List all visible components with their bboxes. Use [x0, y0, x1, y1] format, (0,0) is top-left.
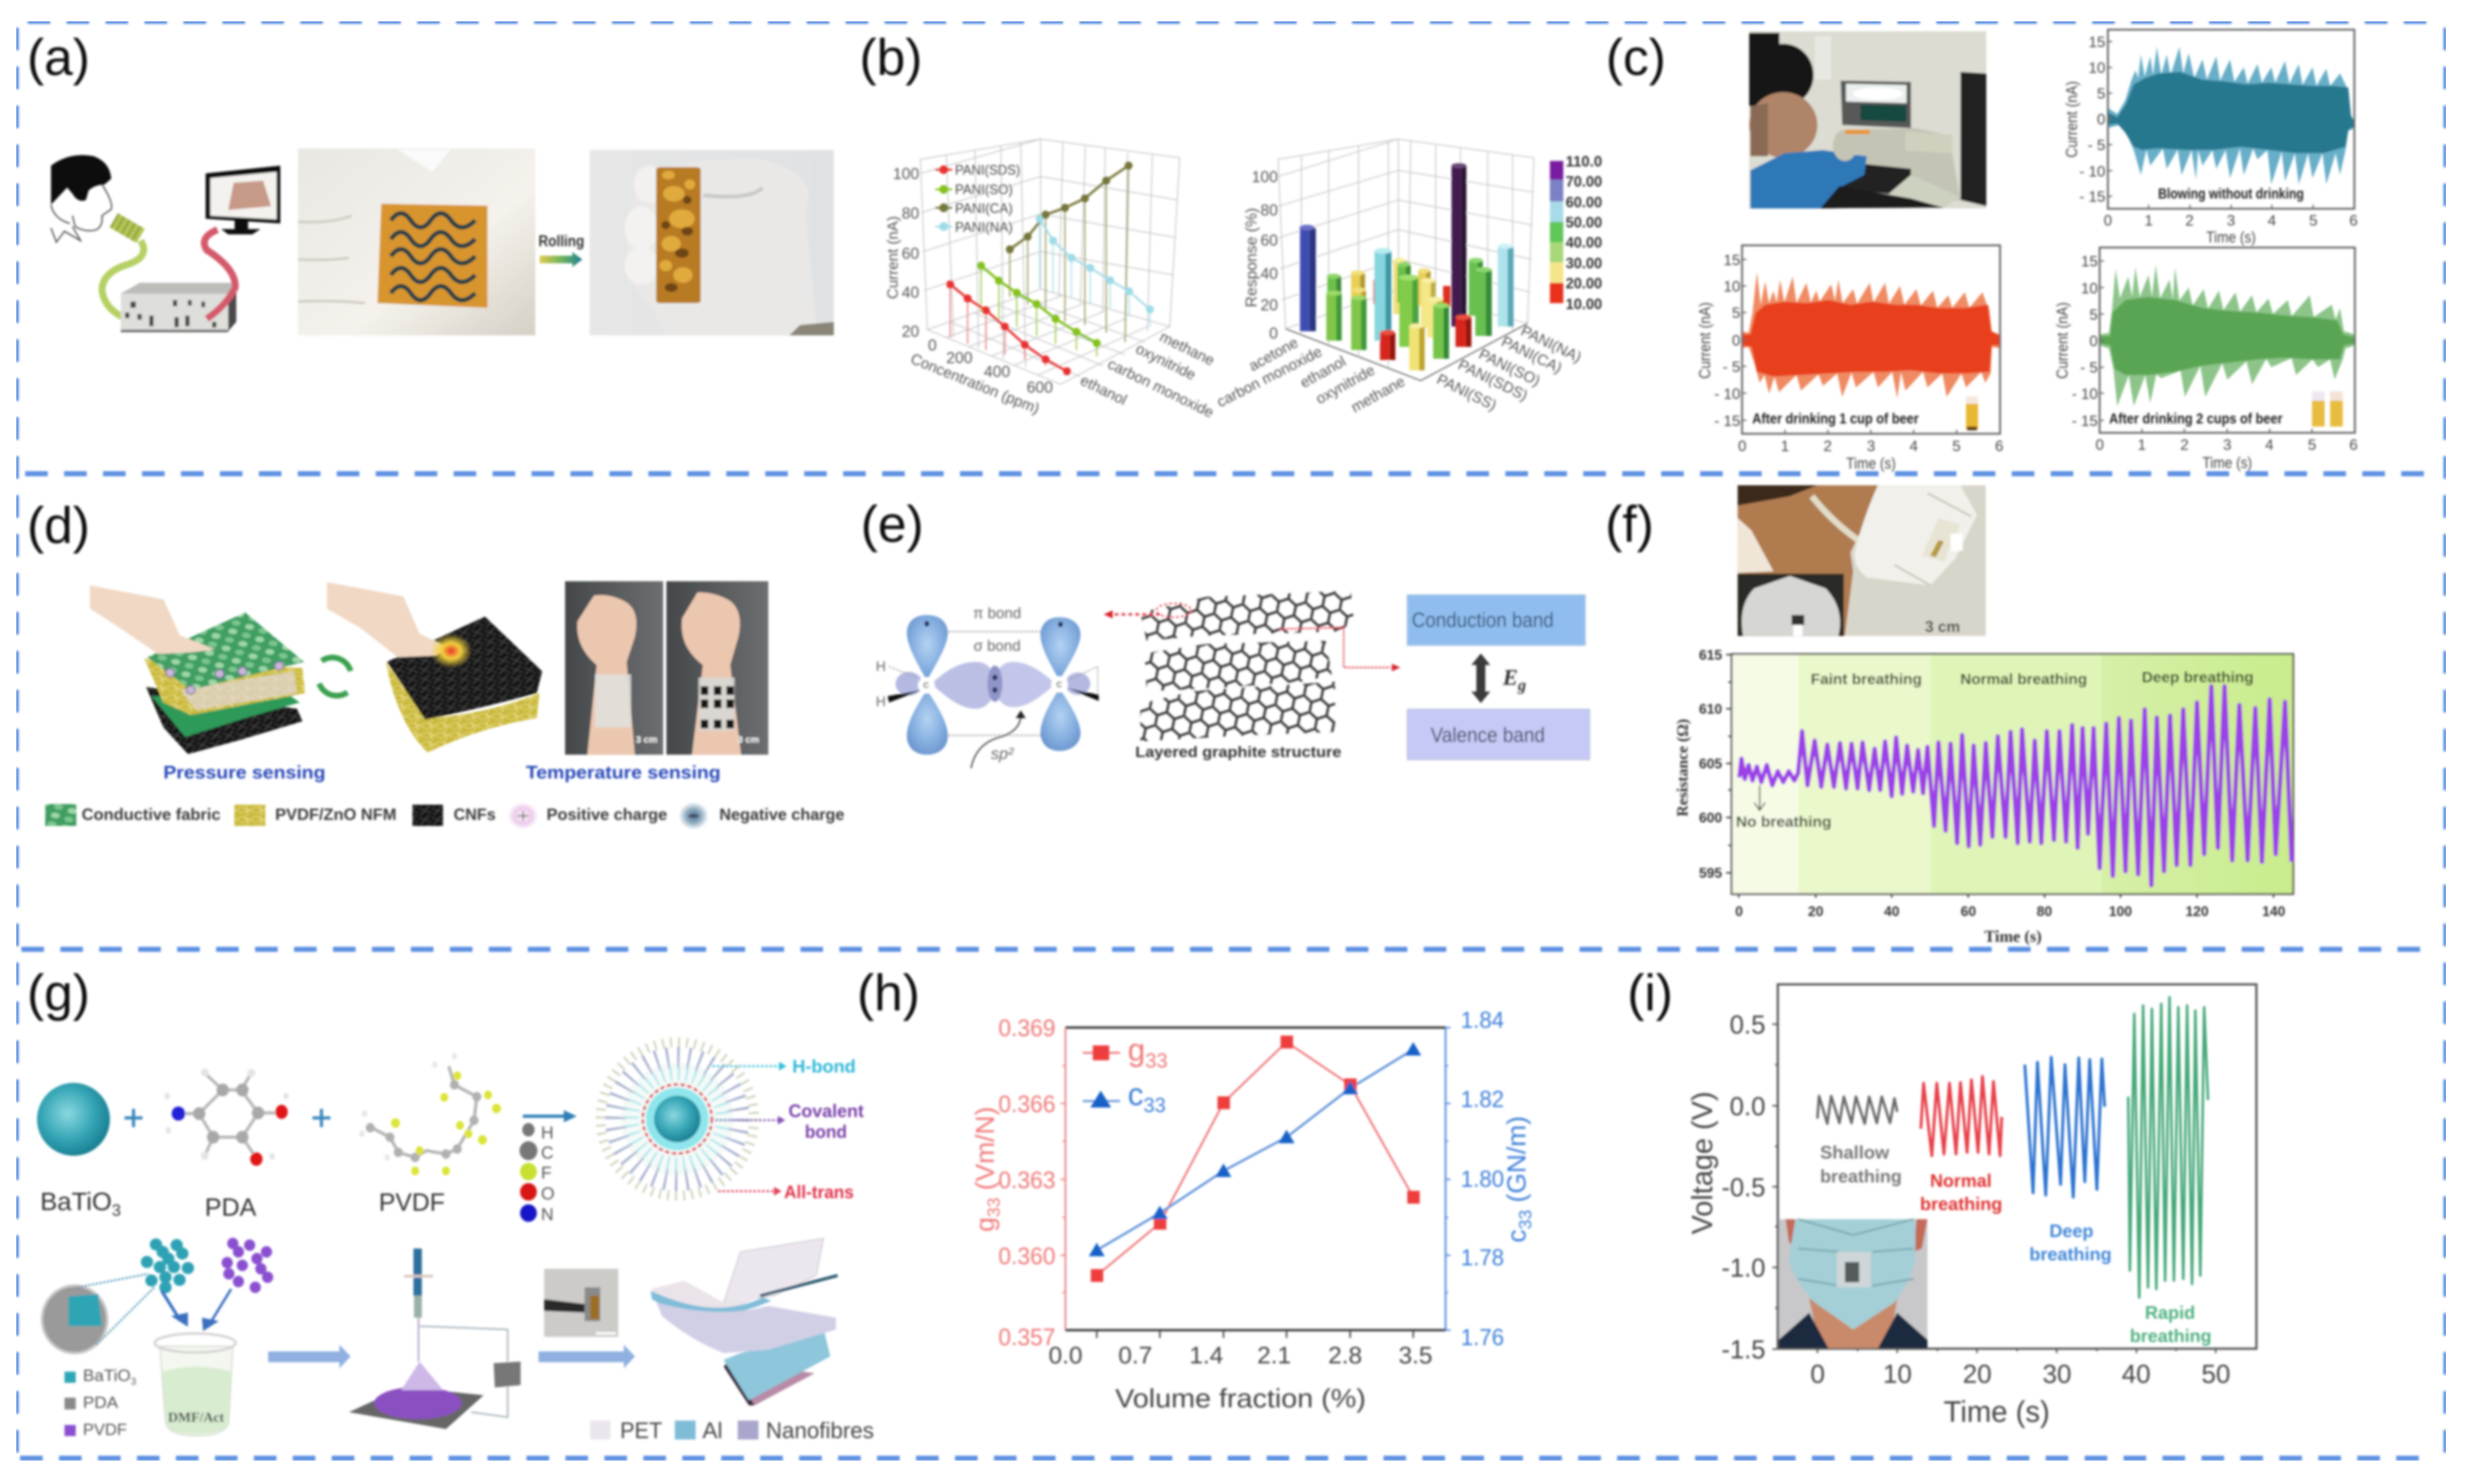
arrow: band gap: E [1503, 665, 1518, 690]
panel: f [1605, 485, 2293, 946]
chart: voltage vs time for breathing modes: -1.0 [1721, 1253, 1765, 1282]
chart: g33 and c33 vs volume fraction: g [1128, 1032, 1145, 1067]
chart: resistance vs time: Time (s) [1984, 927, 2042, 946]
illustration: pressure sensing layers with finger [90, 586, 305, 754]
3D line chart: current vs concentration: 80 [902, 205, 919, 222]
3D bar chart: response by gas: PANI(SDS) [1455, 356, 1530, 405]
label f: (f) [1605, 496, 1654, 553]
legend: atom types: O [541, 1184, 555, 1203]
3D bar chart: response by gas: 60 [1260, 232, 1278, 249]
photo: fabricated device [544, 1268, 618, 1337]
chart: after drinking 2 cups of beer: 2 [2180, 437, 2189, 454]
photo: subject blowing into sensor [1749, 31, 1987, 209]
legend: materials and charges: Positive charge [547, 805, 667, 824]
legend: materials and charges [45, 803, 844, 829]
chart: resistance vs time [1674, 647, 2293, 946]
diagram: particle cross-section and precursor mixing: BaTiO [83, 1366, 131, 1385]
chart: voltage vs time for breathing modes: 0.5 [1730, 1010, 1765, 1039]
chart: after drinking 1 cup of beer: - 5 [1723, 359, 1740, 376]
arrow: band gap [1471, 653, 1526, 703]
diagram: sp2 orbitals: σ bond [974, 638, 1020, 655]
chart: after drinking 2 cups of beer: 0 [2090, 333, 2098, 350]
3D bar chart: response by gas: PANI(SS) [1434, 371, 1499, 414]
chart: resistance vs time: Resistance (Ω) [1674, 719, 1691, 817]
diagram: coated nanoparticle with annotations [601, 1042, 864, 1203]
chart: resistance vs time: 120 [2186, 903, 2208, 919]
chart: voltage vs time for breathing modes: Voltage (V) [1686, 1091, 1718, 1235]
photos: wrist-worn sensors: 3 cm [738, 734, 759, 745]
3D bar chart: response by gas: methane [1348, 373, 1408, 417]
chart: g33 and c33 vs volume fraction: 33 [1143, 1094, 1166, 1116]
3D bar chart: response by gas: 20 [1260, 297, 1278, 314]
chart: resistance vs time: 605 [1699, 756, 1722, 772]
panel: d [27, 497, 844, 829]
3D bar chart: response by gas: ethanol [1297, 353, 1349, 391]
chart: resistance vs time: 20 [1808, 903, 1823, 919]
photo: sensor on gloved palm [298, 148, 535, 336]
3D line chart: current vs concentration: PANI(CA) [955, 200, 1013, 216]
legend: atom types: N [541, 1204, 554, 1224]
3D line chart: current vs concentration: PANI(SDS) [955, 162, 1020, 178]
photos: wrist-worn sensors [565, 581, 768, 755]
chart: after drinking 1 cup of beer: 15 [1723, 252, 1740, 269]
colour scale legend: 70.00 [1566, 173, 1602, 190]
colour scale legend: 50.00 [1566, 214, 1602, 231]
chart: resistance vs time: No breathing [1736, 814, 1831, 831]
legend: atom types: C [541, 1143, 554, 1162]
chart: g33 and c33 vs volume fraction: 1.82 [1461, 1086, 1504, 1112]
photo: rolled sensor held in glove [589, 150, 834, 336]
chart: blowing without drinking: 1 [2144, 212, 2153, 229]
chart: voltage vs time for breathing modes: Rapid [2145, 1303, 2195, 1323]
chart: blowing without drinking: Time (s) [2206, 229, 2256, 246]
3D line chart: current vs concentration: methane [1157, 329, 1217, 369]
diagram: electrospinning setup [349, 1248, 521, 1429]
legend: device layers [590, 1417, 874, 1443]
3D bar chart: response by gas: PANI(SO) [1476, 346, 1542, 390]
3D line chart: current vs concentration: 20 [902, 323, 919, 341]
chart: g33 and c33 vs volume fraction: 0.360 [998, 1243, 1055, 1270]
chart: after drinking 2 cups of beer: 5 [2308, 437, 2316, 454]
arrow: band gap: g [1517, 676, 1526, 694]
diagram: sp2 orbitals: H [876, 694, 886, 709]
chart: after drinking 1 cup of beer: 3 [1867, 438, 1875, 455]
chart: blowing without drinking: 0 [2103, 212, 2112, 229]
photo: subject wearing mask with sensor [1779, 1219, 1928, 1348]
chart: voltage vs time for breathing modes: breathing [2029, 1245, 2112, 1265]
chart: g33 and c33 vs volume fraction: 0.369 [998, 1015, 1055, 1042]
legend: device layers: Al [702, 1417, 723, 1443]
illustration: layered device structure [651, 1238, 837, 1405]
label b: (b) [859, 29, 922, 86]
chart: after drinking 1 cup of beer: 5 [1732, 305, 1740, 322]
chart: g33 and c33 vs volume fraction [970, 1007, 1535, 1413]
chart: after drinking 2 cups of beer: Time (s) [2203, 454, 2252, 472]
panel: i [1627, 964, 2256, 1428]
chart: resistance vs time: 100 [2109, 903, 2132, 919]
chart: g33 and c33 vs volume fraction: Volume fraction (%) [1115, 1383, 1366, 1413]
label d: (d) [27, 497, 90, 554]
chart: after drinking 1 cup of beer: 10 [1723, 278, 1740, 295]
chart: after drinking 2 cups of beer: Current (nA) [2054, 302, 2071, 379]
chart: resistance vs time: Normal breathing [1960, 671, 2087, 688]
chart: after drinking 2 cups of beer: After drinking 2 cups of beer [2109, 410, 2283, 427]
legend: materials and charges: Conductive fabric [82, 805, 221, 824]
diagram: sp2 orbitals: C [923, 680, 929, 690]
colour scale legend: 60.00 [1566, 194, 1602, 211]
molecule row: BaTiO3 + PDA + PVDF: PVDF [379, 1189, 445, 1216]
chart: after drinking 2 cups of beer: 3 [2223, 437, 2232, 454]
3D bar chart: response by gas: 0 [1269, 325, 1278, 342]
chart: after drinking 1 cup of beer: - 10 [1715, 386, 1740, 403]
chart: after drinking 2 cups of beer: - 15 [2072, 413, 2098, 430]
chart: g33 and c33 vs volume fraction: 0.357 [998, 1324, 1055, 1351]
chart: voltage vs time for breathing modes: 0.0 [1730, 1091, 1765, 1121]
chart: resistance vs time: 40 [1884, 903, 1899, 919]
legend: materials and charges: CNFs [454, 805, 496, 824]
3D line chart: current vs concentration: 60 [902, 245, 919, 263]
3D bar chart: response by gas: carbon monoxide [1214, 343, 1325, 411]
chart: voltage vs time for breathing modes: breathing [2130, 1326, 2212, 1346]
chart: blowing without drinking: 6 [2349, 212, 2358, 229]
3D bar chart: response by gas: 80 [1260, 202, 1278, 219]
chart: after drinking 1 cup of beer: - 15 [1715, 413, 1740, 430]
diagram: coated nanoparticle with annotations: All-trans [784, 1182, 854, 1203]
diagram: particle cross-section and precursor mixing [42, 1238, 273, 1439]
arrow: rolling [538, 232, 584, 267]
chart: blowing without drinking: Blowing without drinking [2158, 185, 2304, 202]
chart: after drinking 2 cups of beer: 5 [2090, 307, 2098, 324]
chart: blowing without drinking: 15 [2088, 34, 2105, 51]
3D line chart: current vs concentration [885, 139, 1217, 422]
chart: voltage vs time for breathing modes: breathing [1920, 1194, 2002, 1214]
label c: (c) [1606, 29, 1666, 86]
chart: g33 and c33 vs volume fraction: 1.76 [1461, 1324, 1504, 1350]
chart: g33 and c33 vs volume fraction: 0.0 [1049, 1343, 1083, 1369]
chart: g33 and c33 vs volume fraction: 0.363 [998, 1167, 1055, 1194]
chart: g33 and c33 vs volume fraction: (Vm/N) [970, 1106, 1000, 1198]
chart: after drinking 1 cup of beer: 4 [1909, 438, 1918, 455]
colour scale legend [1550, 153, 1602, 313]
chart: blowing without drinking: - 15 [2080, 188, 2105, 205]
diagram: particle cross-section and precursor mixing: PVDF [83, 1420, 127, 1439]
3D bar chart: response by gas: PANI(NA) [1518, 322, 1584, 366]
chart: after drinking 1 cup of beer [1696, 245, 2004, 472]
chart: after drinking 2 cups of beer: - 10 [2072, 386, 2098, 403]
molecule row: BaTiO3 + PDA + PVDF: 3 [112, 1201, 121, 1219]
caption: pressure sensing: Pressure sensing [163, 763, 325, 783]
diagram: sp2 orbitals: H [876, 658, 886, 674]
chart: g33 and c33 vs volume fraction: g [970, 1217, 1000, 1232]
colour scale legend: 30.00 [1566, 255, 1602, 272]
legend: atom types [520, 1123, 555, 1224]
chart: voltage vs time for breathing modes: Deep [2049, 1221, 2093, 1241]
chart: blowing without drinking: 10 [2088, 60, 2105, 77]
chart: after drinking 2 cups of beer: 1 [2137, 437, 2146, 454]
label e: (e) [861, 496, 924, 553]
legend: device layers: Nanofibres [766, 1417, 874, 1443]
chart: g33 and c33 vs volume fraction: 33 [984, 1198, 1003, 1217]
chart: g33 and c33 vs volume fraction: 1.78 [1461, 1245, 1504, 1270]
chart: g33 and c33 vs volume fraction: 1.80 [1461, 1166, 1504, 1192]
diagram: layered graphite structure: Layered graphite structure [1135, 744, 1341, 761]
chart: after drinking 1 cup of beer: After drinking 1 cup of beer [1752, 410, 1919, 427]
3D bar chart: response by gas: acetone [1246, 334, 1301, 375]
3D line chart: current vs concentration: oxynitride [1133, 341, 1198, 384]
chart: after drinking 1 cup of beer: 6 [1995, 438, 2004, 455]
molecule row: BaTiO3 + PDA + PVDF: PDA [205, 1194, 256, 1221]
molecule row: BaTiO3 + PDA + PVDF [37, 1053, 501, 1221]
colour scale legend: 110.0 [1566, 153, 1602, 170]
3D line chart: current vs concentration: 100 [893, 165, 919, 183]
chart: g33 and c33 vs volume fraction: 1.84 [1461, 1007, 1504, 1033]
label a: (a) [27, 29, 90, 86]
chart: blowing without drinking [2063, 30, 2358, 246]
chart: blowing without drinking: 2 [2185, 212, 2194, 229]
legend: atom types: F [541, 1163, 552, 1182]
chart: resistance vs time: 595 [1699, 865, 1722, 881]
chart: g33 and c33 vs volume fraction: 33 [1145, 1049, 1167, 1072]
diagram: coated nanoparticle with annotations: H-bond [792, 1057, 856, 1077]
chart: resistance vs time: 600 [1699, 810, 1722, 826]
chart: after drinking 1 cup of beer: 0 [1732, 332, 1740, 349]
chart: g33 and c33 vs volume fraction: 2.8 [1328, 1343, 1362, 1369]
chart: voltage vs time for breathing modes: 40 [2122, 1359, 2151, 1389]
box: conduction band: Conduction band [1412, 608, 1554, 631]
chart: resistance vs time: 0 [1735, 903, 1743, 919]
chart: voltage vs time for breathing modes [1686, 985, 2256, 1428]
chart: voltage vs time for breathing modes: -0.5 [1721, 1172, 1765, 1202]
illustration: temperature sensing layers with finger [327, 582, 542, 753]
chart: blowing without drinking: 5 [2309, 212, 2318, 229]
illustration: person breathing into sensor connected to analyser and monitor [51, 155, 280, 332]
chart: after drinking 1 cup of beer: Current (nA) [1696, 302, 1714, 379]
legend: atom types: H [541, 1123, 554, 1142]
chart: resistance vs time: Deep breathing [2142, 669, 2254, 686]
chart: blowing without drinking: 3 [2227, 212, 2235, 229]
chart: voltage vs time for breathing modes: 50 [2201, 1359, 2230, 1389]
chart: blowing without drinking: - 10 [2080, 163, 2105, 180]
chart: after drinking 2 cups of beer: 15 [2081, 253, 2098, 270]
chart: blowing without drinking: - 5 [2088, 137, 2105, 154]
molecule row: BaTiO3 + PDA + PVDF: BaTiO [40, 1188, 112, 1216]
chart: g33 and c33 vs volume fraction: 3.5 [1399, 1343, 1432, 1369]
3D line chart: current vs concentration: ethanol [1077, 372, 1130, 409]
3D line chart: current vs concentration: Current (nA) [885, 216, 902, 299]
chart: voltage vs time for breathing modes: breathing [1820, 1167, 1902, 1187]
chart: blowing without drinking: 4 [2267, 212, 2276, 229]
label h: (h) [857, 964, 920, 1022]
diagram: sp2 orbitals: π bond [973, 605, 1021, 622]
chart: g33 and c33 vs volume fraction: c [1128, 1077, 1143, 1112]
photos: wrist-worn sensors: 3 cm [636, 734, 657, 745]
3D line chart: current vs concentration: 40 [902, 284, 919, 302]
3D bar chart: response by gas: Response (%) [1243, 208, 1260, 307]
3D line chart: current vs concentration: 600 [1027, 379, 1053, 396]
panel: a [27, 29, 834, 336]
arrow: assembly [523, 1110, 577, 1122]
chart: after drinking 2 cups of beer: - 5 [2080, 359, 2098, 376]
chart: resistance vs time: Faint breathing [1811, 671, 1922, 688]
panel: e [861, 496, 1590, 768]
diagram: coated nanoparticle with annotations: bond [805, 1122, 847, 1142]
panel: b [859, 29, 1602, 422]
3D bar chart: response by gas: PANI(CA) [1498, 333, 1564, 377]
chart: after drinking 2 cups of beer [2054, 248, 2358, 472]
chart: blowing without drinking: Current (nA) [2063, 81, 2081, 158]
3D bar chart: response by gas: 100 [1252, 168, 1278, 186]
chart: g33 and c33 vs volume fraction: 2.1 [1257, 1343, 1291, 1369]
photo: sensor on face mask [1738, 485, 1986, 636]
arrows: red dotted links [1104, 603, 1400, 671]
chart: after drinking 2 cups of beer: 4 [2265, 437, 2274, 454]
colour scale legend: 40.00 [1566, 234, 1602, 251]
box: valence band: Valence band [1431, 723, 1545, 746]
chart: voltage vs time for breathing modes: Time (s) [1944, 1395, 2049, 1428]
chart: voltage vs time for breathing modes: -1.5 [1721, 1334, 1765, 1364]
3D bar chart: response by gas: 40 [1260, 265, 1278, 283]
diagram: particle cross-section and precursor mixing: PDA [83, 1393, 119, 1412]
3D line chart: current vs concentration: 0 [928, 337, 937, 354]
chart: after drinking 2 cups of beer: 0 [2095, 437, 2104, 454]
chart: voltage vs time for breathing modes: 0 [1810, 1359, 1825, 1389]
label g: (g) [27, 964, 90, 1022]
panel: c [1606, 29, 2358, 472]
3D line chart: current vs concentration: 200 [946, 349, 973, 367]
diagram: coated nanoparticle with annotations: Covalent [788, 1101, 864, 1121]
chart: after drinking 1 cup of beer: 0 [1738, 438, 1747, 455]
3D bar chart: response by gas: oxynitride [1313, 362, 1378, 408]
colour scale legend: 20.00 [1566, 275, 1602, 292]
chart: g33 and c33 vs volume fraction: (GN/m) [1502, 1116, 1531, 1210]
chart: after drinking 1 cup of beer: 2 [1823, 438, 1832, 455]
diagram: particle cross-section and precursor mixing: DMF/Act [168, 1409, 224, 1425]
chart: after drinking 1 cup of beer: Time (s) [1846, 455, 1896, 472]
chart: resistance vs time: 140 [2262, 903, 2285, 919]
diagram: layered graphite structure [1135, 591, 1354, 761]
arrow: to electrospinning [268, 1345, 351, 1368]
3D line chart: current vs concentration: Concentration (ppm) [908, 351, 1042, 418]
legend: materials and charges: PVDF/ZnO NFM [275, 805, 396, 824]
panel: h [857, 964, 1535, 1413]
box: conduction band [1407, 595, 1585, 645]
chart: resistance vs time: 80 [2037, 903, 2052, 919]
chart: resistance vs time: 60 [1961, 903, 1976, 919]
3D line chart: current vs concentration: PANI(SO) [955, 182, 1013, 197]
diagram: sp2 orbitals: C [1056, 680, 1062, 689]
legend: materials and charges: Negative charge [719, 805, 844, 824]
3D line chart: current vs concentration: carbon monoxide [1105, 356, 1216, 422]
chart: after drinking 1 cup of beer: 1 [1781, 438, 1789, 455]
chart: g33 and c33 vs volume fraction: c [1502, 1230, 1531, 1243]
chart: g33 and c33 vs volume fraction: 0.7 [1118, 1343, 1152, 1369]
photo: sensor on face mask: 3 cm [1925, 618, 1960, 636]
chart: after drinking 2 cups of beer: 10 [2081, 280, 2098, 297]
chart: voltage vs time for breathing modes: 10 [1883, 1359, 1912, 1389]
chart: voltage vs time for breathing modes: 20 [1963, 1359, 1992, 1389]
chart: g33 and c33 vs volume fraction: 0.366 [998, 1091, 1055, 1118]
colour scale legend: 10.00 [1566, 296, 1602, 313]
3D bar chart: response by gas [1214, 139, 1584, 417]
chart: blowing without drinking: 5 [2097, 85, 2105, 102]
legend: device layers: PET [620, 1417, 662, 1443]
chart: after drinking 2 cups of beer: 6 [2349, 437, 2358, 454]
chart: blowing without drinking: 0 [2097, 111, 2105, 128]
label i: (i) [1627, 964, 1673, 1022]
3D line chart: current vs concentration: 400 [984, 363, 1010, 381]
arrow: rolling: Rolling [538, 232, 584, 250]
arrow: to device [538, 1345, 635, 1368]
chart: voltage vs time for breathing modes: Normal [1930, 1171, 1992, 1191]
diagram: sp2 orbitals: sp² [991, 744, 1014, 763]
chart: resistance vs time: 610 [1699, 701, 1722, 717]
chart: g33 and c33 vs volume fraction: 1.4 [1189, 1343, 1223, 1369]
diagram: sp2 orbitals [876, 605, 1099, 768]
chart: voltage vs time for breathing modes: 30 [2043, 1359, 2071, 1389]
chart: after drinking 1 cup of beer: 5 [1952, 438, 1961, 455]
chart: voltage vs time for breathing modes: Shallow [1820, 1143, 1889, 1163]
diagram: particle cross-section and precursor mixing: 3 [131, 1377, 136, 1387]
icon: cycling arrows [319, 658, 351, 696]
chart: resistance vs time: 615 [1699, 647, 1722, 663]
chart: g33 and c33 vs volume fraction: 33 [1515, 1210, 1535, 1230]
3D line chart: current vs concentration: PANI(NA) [955, 219, 1013, 235]
caption: temperature sensing: Temperature sensing [526, 763, 721, 783]
panel: g [27, 964, 874, 1443]
box: valence band [1407, 709, 1590, 760]
